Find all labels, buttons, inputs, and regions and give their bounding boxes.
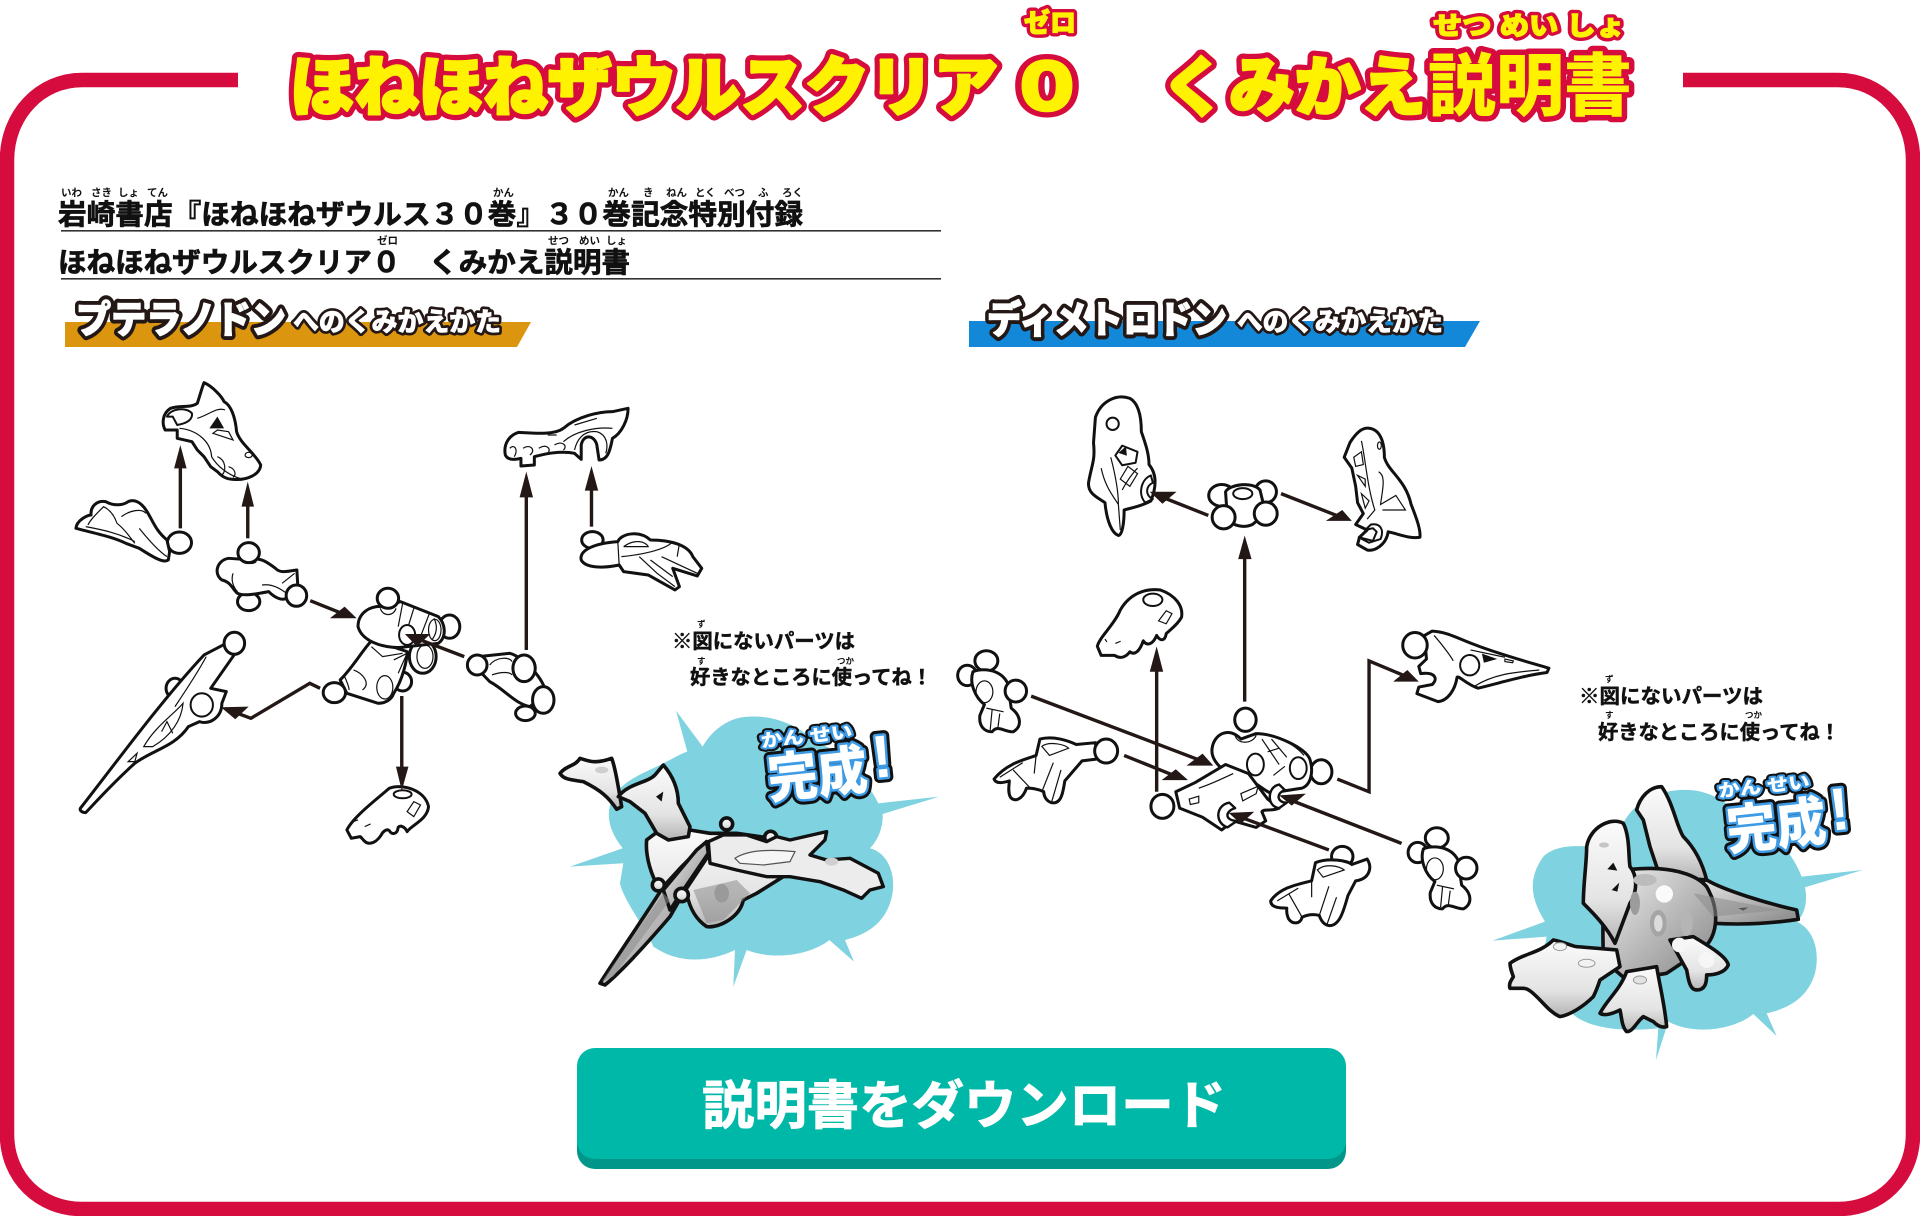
title outline layer: ほねほねザウルスクリア — [290, 51, 998, 124]
section heading: pteranodon: プテラノドン — [76, 300, 286, 342]
subtitle line 1 ruby: とく — [695, 187, 716, 199]
note: pteranodon: す — [697, 656, 706, 666]
subtitle line 1 ruby: べつ — [724, 187, 745, 199]
completed label: かん せい — [1717, 772, 1811, 801]
section heading: pteranodon: へのくみかえかた — [293, 307, 501, 337]
subtitle line 2 ruby: ゼロ — [377, 234, 398, 247]
note: pteranodon: ※図にないパーツは — [672, 630, 855, 653]
completed label: かん せい — [760, 722, 853, 751]
assembly diagram: pteranodon — [76, 383, 702, 843]
note: dimetrodon: 好きなところに使ってね！ — [1598, 721, 1840, 744]
section heading: dimetrodon — [969, 299, 1480, 347]
note: pteranodon: ず — [697, 619, 706, 629]
subtitle line 1 ruby: ふ — [758, 187, 769, 199]
completed label — [760, 718, 896, 811]
part: central body — [1151, 708, 1332, 830]
subtitle line 2 ruby — [377, 234, 627, 247]
part: tall head left — [1088, 397, 1155, 535]
title zero: ０ — [1007, 51, 1087, 124]
note: dimetrodon: つか — [1745, 710, 1763, 720]
arrows — [174, 445, 598, 791]
part: hand left — [994, 738, 1118, 803]
download button — [577, 1048, 1346, 1169]
title kana right: くみかえ — [1161, 51, 1426, 124]
completed label: 完成 — [765, 740, 870, 810]
completed label: ! — [1826, 775, 1853, 844]
part: center connector — [1209, 481, 1277, 529]
subtitle line 2 ruby: せつ — [548, 235, 569, 247]
section heading: dimetrodon: へのくみかえかた — [1237, 307, 1443, 337]
subtitle line 1 ruby: ろく — [782, 187, 803, 199]
note: pteranodon: 好きなところに使ってね！ — [690, 666, 932, 689]
title — [290, 8, 1632, 125]
completed label: 完成 — [765, 740, 870, 810]
note: dimetrodon: す — [1605, 710, 1614, 720]
completed label: かん せい — [760, 722, 853, 751]
title kanji right: 説明書 — [1428, 49, 1632, 125]
subtitle line 2 ruby: めい — [579, 235, 600, 247]
completed label: ! — [1826, 775, 1853, 844]
title ruby setsumeisho: せつ めい しょ — [1433, 11, 1625, 41]
section heading: dimetrodon: ディメトロドン — [987, 299, 1227, 342]
note: pteranodon: つか — [837, 656, 855, 666]
completed label: 完成 — [1724, 792, 1829, 862]
section heading: pteranodon: プテラノドン — [76, 300, 286, 342]
subtitle line 1 ruby: いわ — [61, 187, 82, 199]
section heading: dimetrodon: ディメトロドン — [987, 299, 1227, 342]
subtitle lines — [58, 187, 941, 280]
section heading: pteranodon — [65, 300, 531, 347]
part: central body — [323, 588, 460, 703]
title main text left: ほねほねザウルスクリア — [290, 51, 998, 124]
subtitle line 1 ruby: ねん — [666, 187, 687, 199]
part: right sword wing — [1403, 631, 1549, 702]
title outline layer: せつ めい しょ — [1433, 11, 1625, 41]
title outline layer — [290, 8, 1632, 125]
pteranodon figure — [560, 758, 883, 985]
part: skull bottom — [347, 787, 429, 843]
subtitle line 1 ruby: てん — [147, 187, 168, 199]
section heading: pteranodon: へのくみかえかた — [293, 307, 501, 337]
completed label: 完成 — [1724, 792, 1829, 862]
completed label: ! — [868, 722, 895, 791]
subtitle line 1 ruby: しょ — [118, 187, 139, 199]
part: head with crest — [163, 383, 261, 480]
subtitle line 1 ruby: かん — [493, 187, 514, 199]
arrows — [1031, 492, 1419, 850]
title ruby zero: ゼロ — [1024, 8, 1076, 38]
section heading: dimetrodon: へのくみかえかた — [1237, 307, 1443, 337]
note: dimetrodon — [1579, 674, 1840, 744]
subtitle line 1 ruby: き — [643, 187, 654, 199]
completed model: pteranodon — [560, 711, 939, 987]
subtitle line 1 ruby: かん — [608, 187, 629, 199]
part: upper jaw right — [505, 408, 628, 466]
part: hand bottom — [1271, 846, 1370, 926]
part: ball connector right — [467, 653, 554, 721]
burst cloud — [1493, 784, 1863, 1060]
part: sword wing — [80, 632, 245, 813]
title outline layer: ゼロ — [1024, 8, 1076, 38]
download button: 説明書をダウンロード — [702, 1078, 1226, 1136]
note: dimetrodon: ず — [1605, 674, 1614, 684]
dimetrodon figure — [1510, 787, 1798, 1032]
assembly diagram: dimetrodon — [958, 397, 1549, 926]
subtitle line 1: 岩崎書店『ほねほねザウルス３０巻』３０巻記念特別付録 — [58, 199, 803, 230]
part: skull — [1097, 590, 1182, 657]
part: ball connector left — [958, 651, 1027, 732]
completed model: dimetrodon — [1493, 768, 1863, 1060]
completed label: ! — [868, 722, 895, 791]
part: ball connector upper left — [217, 543, 307, 611]
subtitle line 1 ruby — [61, 187, 803, 199]
part: left wing hand — [76, 501, 192, 561]
part: right head — [1344, 428, 1420, 550]
subtitle line 2: ほねほねザウルスクリア０ くみかえ説明書 — [58, 247, 630, 278]
burst cloud — [570, 711, 939, 987]
subtitle line 1 ruby: さき — [91, 187, 112, 199]
title outline layer: ０ — [1007, 51, 1087, 124]
completed label: かん せい — [1717, 772, 1811, 801]
completed label — [1717, 768, 1853, 862]
title outline layer: くみかえ — [1161, 51, 1426, 124]
note: pteranodon — [672, 619, 932, 689]
part: right wing hand — [581, 532, 702, 590]
part: ball connector lower right — [1408, 828, 1477, 909]
subtitle line 2 ruby: しょ — [606, 235, 627, 247]
note: dimetrodon: ※図にないパーツは — [1579, 685, 1763, 708]
title outline layer: 説明書 — [1428, 49, 1632, 125]
